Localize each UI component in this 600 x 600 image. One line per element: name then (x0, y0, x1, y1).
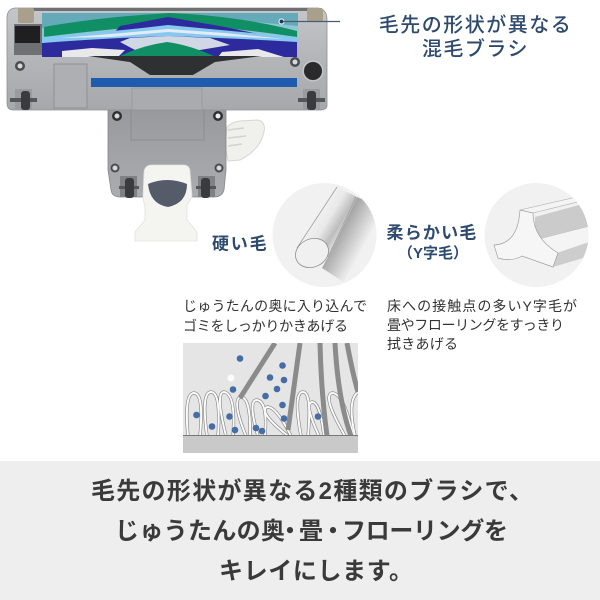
summary text (91, 477, 533, 585)
circle: hard bristle cross-section (272, 183, 376, 287)
text: soft bristle description: 床への接触点の多いY字毛が (387, 298, 577, 314)
callout line to brush (279, 19, 340, 24)
wheels (15, 89, 32, 110)
summary text: じゅうたんの奥 (115, 518, 285, 545)
label: soft bristle (Y-shaped): 柔らかい毛 (386, 224, 478, 242)
summary text: 畳 (299, 518, 323, 545)
text: hard bristle description: じゅうたんの奥に入り込んで (183, 298, 367, 314)
felt pads (18, 8, 34, 23)
summary text: ・ (321, 518, 345, 545)
summary text: キレイにします。 (219, 558, 413, 585)
summary text: フローリングを (342, 517, 508, 545)
label: soft bristle (Y-shaped) (386, 224, 478, 262)
brush shaft end (14, 24, 42, 55)
mixed bristle brush (42, 13, 298, 57)
callout heading: mixed bristle brush: 混毛ブラシ (422, 36, 529, 60)
text: hard bristle description (183, 298, 367, 334)
blue front strip (91, 78, 297, 87)
nozzle handle tab (225, 120, 264, 161)
floor base (183, 436, 358, 453)
text: soft bristle description: 畳やフローリングをすっきり (387, 317, 564, 333)
callout heading: mixed bristle brush (379, 14, 572, 60)
summary band (0, 461, 600, 600)
text: soft bristle description: 拭きあげる (387, 336, 458, 352)
illustration: vacuum cleaner nozzle underside (7, 8, 327, 241)
label: hard bristle: 硬い毛 (212, 234, 268, 254)
diagram background (183, 343, 358, 435)
white pipe (135, 165, 197, 241)
nozzle main body (7, 8, 327, 110)
callout heading: mixed bristle brush: 毛先の形状が異なる (379, 14, 572, 36)
text: soft bristle description (387, 298, 577, 352)
nozzle neck housing (108, 107, 226, 197)
dark brush chamber lip (88, 56, 262, 75)
screws (15, 61, 25, 71)
dial (304, 62, 322, 80)
dust particles (193, 355, 321, 434)
circle: soft Y-shaped bristle (484, 183, 590, 287)
carpet fibres (187, 392, 358, 436)
label: soft bristle (Y-shaped): （Y字毛） (398, 244, 468, 262)
text: hard bristle description: ゴミをしっかりかきあげる (183, 318, 348, 334)
summary text: ・ (278, 518, 302, 545)
summary text: 毛先の形状が異なる2種類のブラシで、 (91, 477, 533, 505)
brush bristles (240, 343, 358, 436)
diagram: bristles lifting dirt from carpet (183, 343, 358, 453)
